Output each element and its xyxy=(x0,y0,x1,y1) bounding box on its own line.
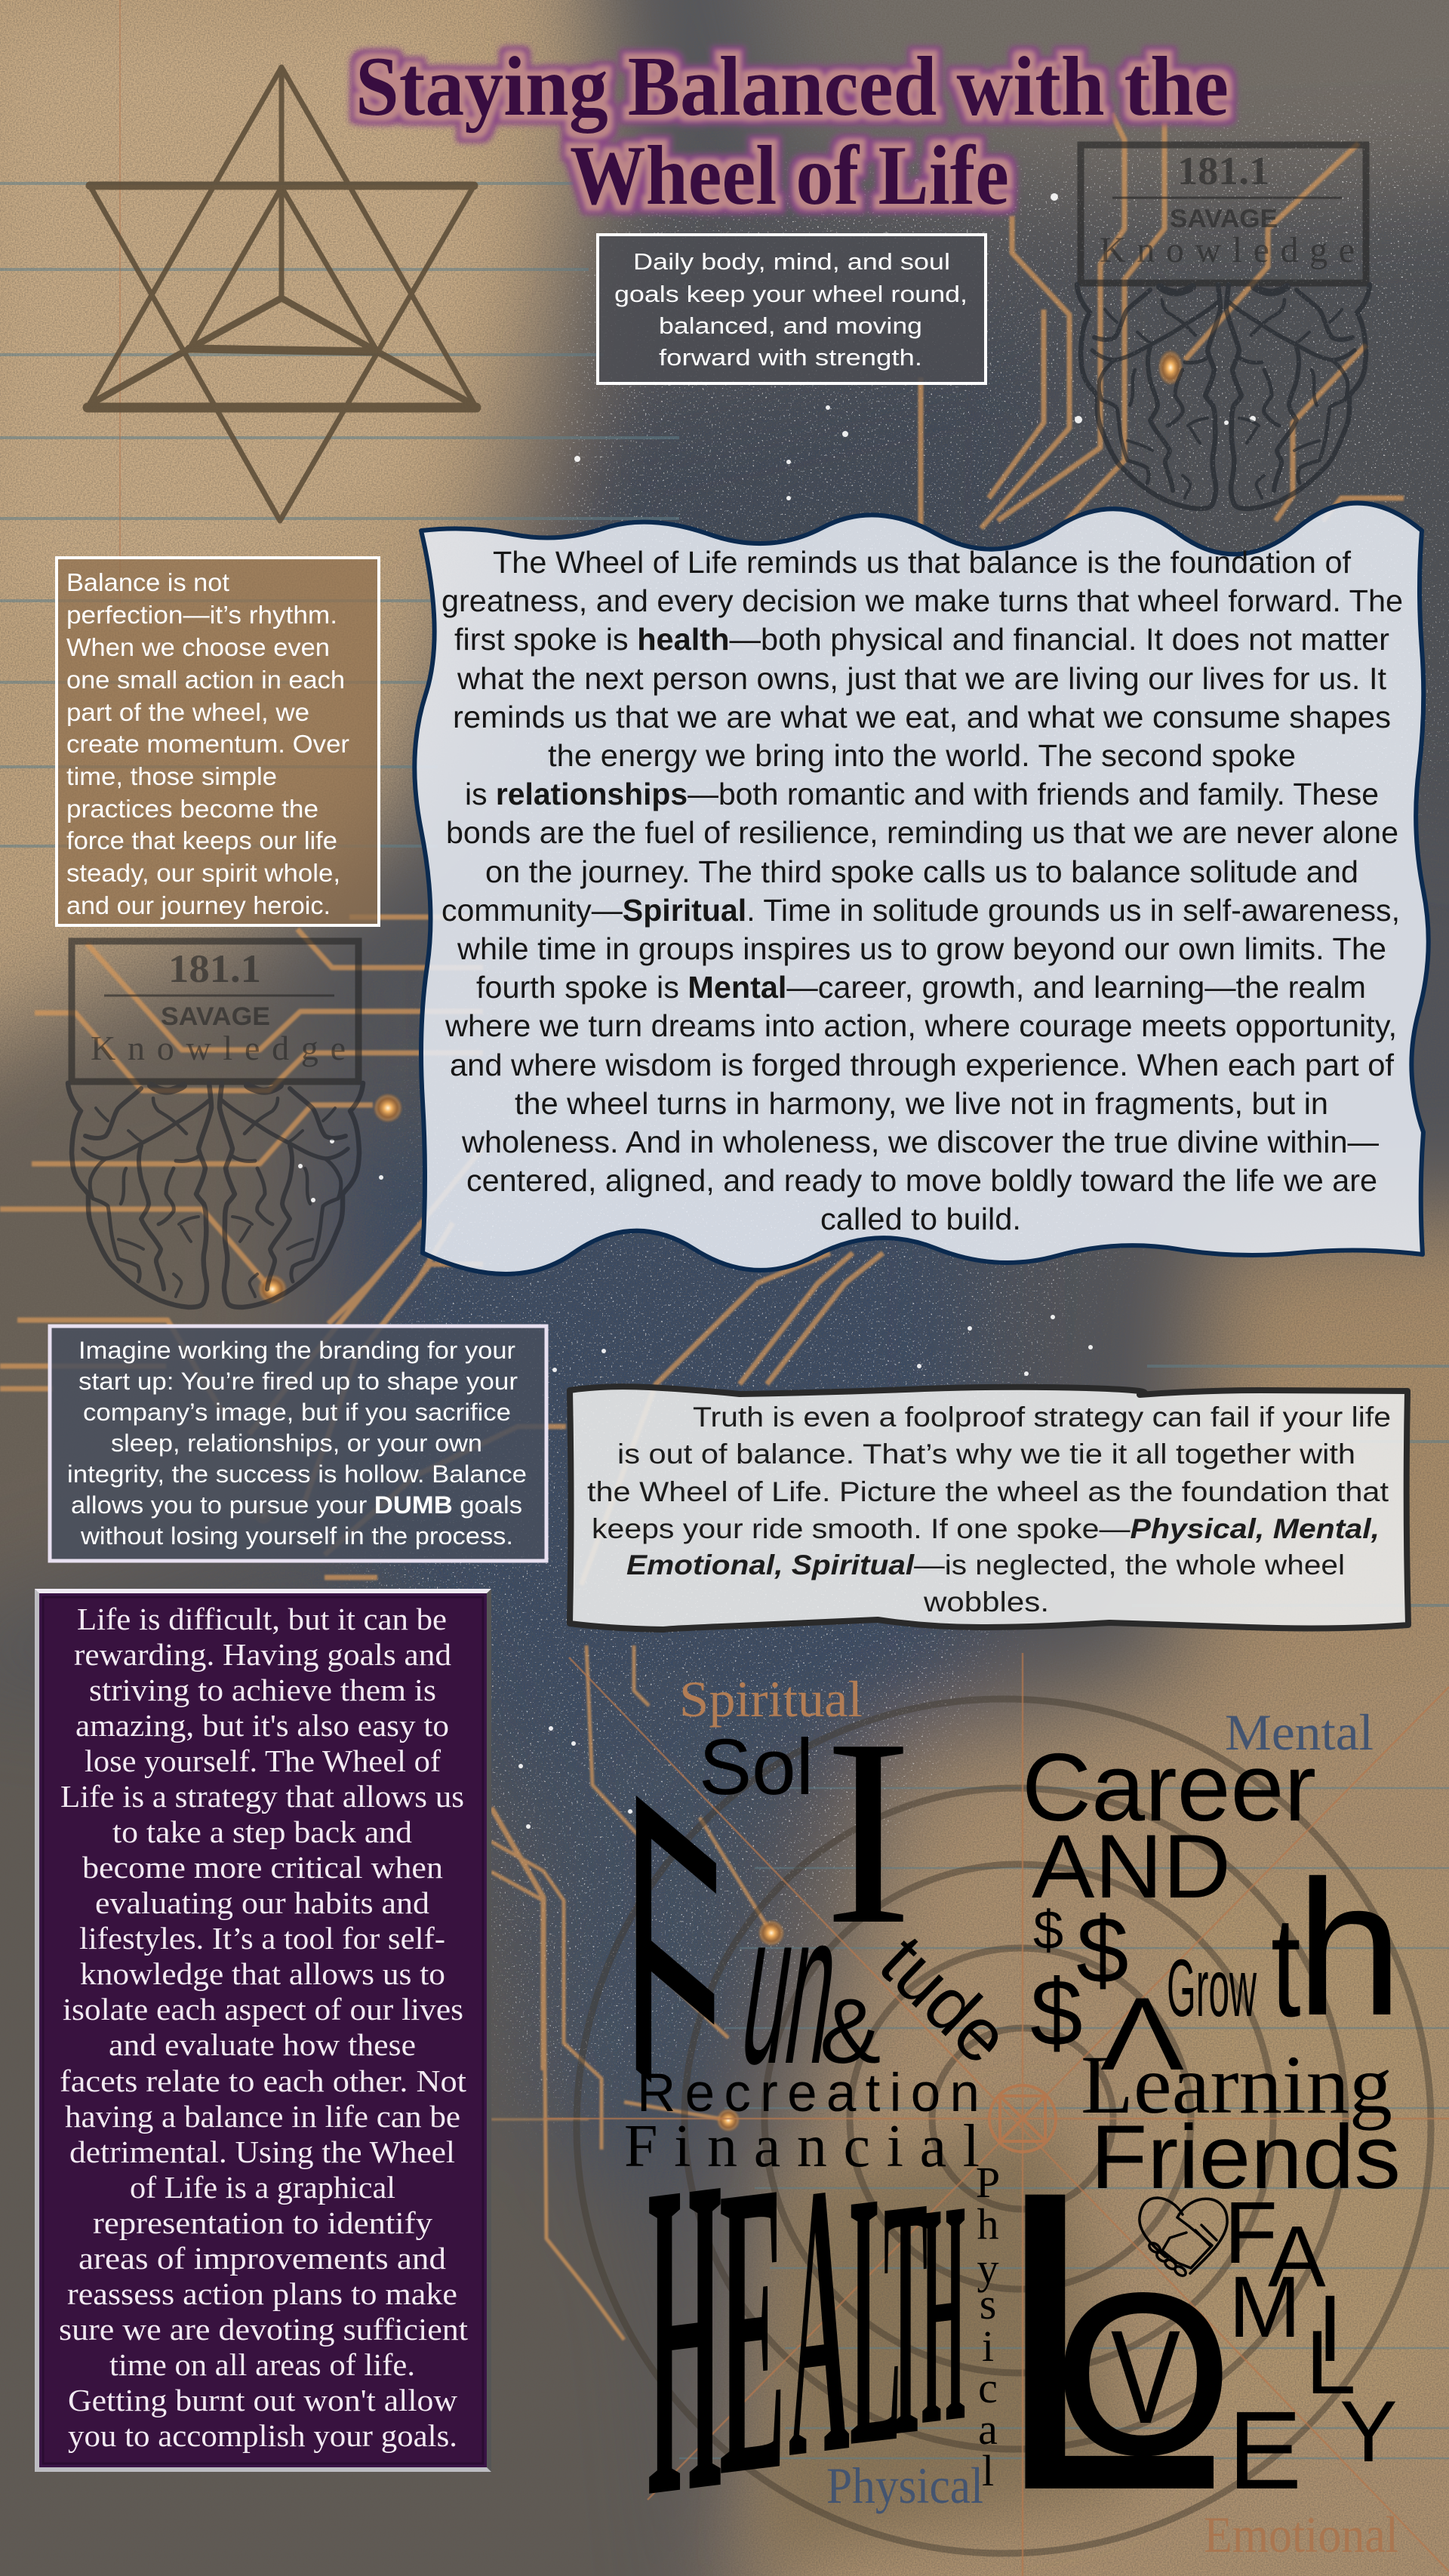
panel: truth wobble text xyxy=(570,1386,1408,1630)
panel: life is difficult: having a balance in life can be xyxy=(65,2099,460,2134)
logo: 181.1 Savage Knowledge (top right): SAVAGE xyxy=(1170,205,1278,233)
word art: mental quadrant: Grow xyxy=(1167,1942,1257,2033)
callout: balance is rhythm xyxy=(57,558,379,925)
panel: life is difficult: rewarding. Having goals and xyxy=(74,1637,451,1672)
callout: daily goals: balanced, and moving xyxy=(659,312,922,339)
panel: wheel of life main text: centered, aligned, and ready to move boldly toward the life we are xyxy=(466,1163,1377,1198)
panel: life is difficult: of Life is a graphical xyxy=(130,2170,395,2205)
icon: merkaba star xyxy=(88,67,476,521)
title: Wheel of Life xyxy=(570,129,1009,223)
callout: daily goals xyxy=(598,235,986,383)
callout: balance is rhythm: practices become the xyxy=(66,795,318,823)
word art: spiritual quadrant xyxy=(623,1684,1026,2227)
callout: balance is rhythm: create momentum. Over xyxy=(66,730,349,758)
callout: balance is rhythm: Balance is not xyxy=(66,568,229,596)
panel: wheel of life main text: on the journey. The third spoke calls us to balance solitude and xyxy=(485,854,1358,889)
word art: mental quadrant: Friends xyxy=(1091,2107,1401,2208)
panel: wheel of life main text: first spoke is health—both physical and financial. It does not matter xyxy=(454,622,1389,657)
panel: life is difficult: facets relate to each other. Not xyxy=(60,2064,467,2098)
word art: spiritual quadrant: tude xyxy=(864,1919,1026,2080)
panel: life is difficult: to take a step back and xyxy=(112,1814,412,1849)
title: Staying Balanced with the xyxy=(355,40,1229,134)
panel: truth wobble text: Truth is even a foolproof strategy can fail if your life xyxy=(693,1402,1391,1433)
callout: imagine branding: without losing yourself in the process. xyxy=(80,1522,513,1550)
word art: emotional quadrant: L xyxy=(990,2102,1228,2576)
panel: truth wobble text: is out of balance. That’s why we tie it all together with xyxy=(617,1439,1355,1470)
panel: life is difficult xyxy=(35,1589,491,2472)
chart: wheel of life rings xyxy=(543,1653,1449,2576)
word art: spiritual quadrant: Recreation xyxy=(637,2064,980,2123)
word art: spiritual quadrant: F xyxy=(623,1697,723,2227)
word art: spiritual quadrant: Financial xyxy=(624,2113,980,2180)
word art: spiritual quadrant: I xyxy=(824,1684,912,1980)
panel: truth wobble text: Emotional, Spiritual —is neglected, the whole wheel xyxy=(626,1550,1345,1580)
vertical word: Physical: Physical xyxy=(976,2158,1000,2495)
panel: wheel of life main text: fourth spoke is Mental—career, growth, and learning—the realm xyxy=(476,970,1366,1005)
panel: life is difficult: knowledge that allows us to xyxy=(80,1956,445,1991)
word art: mental quadrant: h xyxy=(1296,1841,1403,2056)
callout: balance is rhythm: one small action in each xyxy=(66,666,345,694)
panel: life is difficult: you to accomplish your goals. xyxy=(68,2418,457,2453)
word art: emotional quadrant: I xyxy=(1317,2276,1343,2381)
glowing nodes xyxy=(253,349,1183,2132)
callout: balance is rhythm: time, those simple xyxy=(66,762,277,790)
callout: balance is rhythm: When we choose even xyxy=(66,633,330,661)
panel: truth wobble text: keeps your ride smooth. If one spoke— Physical, Mental, xyxy=(592,1513,1380,1544)
word art: spiritual quadrant: & xyxy=(820,1980,881,2082)
icon: wheel hub xyxy=(989,2085,1056,2152)
word art: physical quadrant xyxy=(648,2080,965,2576)
callout: balance is rhythm: force that keeps our life xyxy=(66,826,337,854)
label: Emotional: Emotional xyxy=(1204,2506,1398,2563)
panel: wheel of life main text: the energy we bring into the world. The second spoke xyxy=(548,738,1296,773)
label: Spiritual: Spiritual xyxy=(679,1670,863,1728)
panel: life is difficult: reassess action plans to make xyxy=(67,2276,457,2311)
word art: physical quadrant: L xyxy=(850,2112,901,2523)
word art: mental quadrant: $ xyxy=(1076,1898,1129,2003)
panel: wheel of life main text: bonds are the fuel of resilience, reminding us that we are never alone xyxy=(446,815,1398,850)
panel: wheel of life main text: greatness, and every decision we make turns that wheel forward. The xyxy=(441,583,1403,618)
word art: emotional quadrant: M xyxy=(1229,2259,1301,2356)
callout: imagine branding: company’s image, but if you sacrifice xyxy=(83,1399,511,1426)
panel: truth wobble text: the Wheel of Life. Picture the wheel as the foundation that xyxy=(587,1476,1389,1507)
label: Mental: Mental xyxy=(1225,1703,1374,1761)
panel: life is difficult: striving to achieve them is xyxy=(89,1673,436,1707)
panel: life is difficult: and evaluate how these xyxy=(109,2027,416,2062)
logo: 181.1 Savage Knowledge (top right) xyxy=(1077,145,1370,509)
word art: mental quadrant: Career xyxy=(1022,1734,1316,1841)
word art: mental quadrant: AND xyxy=(1032,1816,1231,1917)
panel: wheel of life main text: wholeness. And in wholeness, we discover the true divine within— xyxy=(461,1125,1379,1159)
panel: wheel of life main text: while time in groups inspires us to grow beyond our own limits. The xyxy=(457,931,1386,966)
callout: daily goals: forward with strength. xyxy=(659,344,922,371)
word art: emotional quadrant xyxy=(990,2102,1398,2576)
panel: wheel of life main text: the wheel turns in harmony, we live not in fragments, but in xyxy=(515,1086,1328,1121)
panel: wheel of life main text: called to build. xyxy=(820,1202,1021,1236)
word art: physical quadrant: T xyxy=(884,2125,928,2510)
panel: life is difficult: amazing, but it's also easy to xyxy=(75,1708,449,1743)
callout: imagine branding xyxy=(50,1326,546,1561)
word art: emotional quadrant: F xyxy=(1224,2184,1278,2282)
callout: imagine branding: Imagine working the branding for your xyxy=(78,1337,515,1364)
word art: mental quadrant: Learning xyxy=(1081,2039,1392,2131)
word art: mental quadrant xyxy=(1022,1734,1403,2208)
word art: mental quadrant: Λ xyxy=(1100,1977,1184,2092)
logo: 181.1 Savage Knowledge (top right): Knowledge xyxy=(1100,230,1355,270)
word art: physical quadrant: H xyxy=(921,2133,965,2492)
panel: wheel of life main text: what the next person owns, just that we are living our lives for us. It xyxy=(457,661,1387,696)
logo: 181.1 Savage Knowledge (left): SAVAGE xyxy=(161,1002,270,1031)
icon: handshake heart xyxy=(1140,2198,1227,2278)
word art: mental quadrant: $ xyxy=(1030,1961,1083,2066)
word art: spiritual quadrant: un xyxy=(730,1867,852,2110)
callout: daily goals: goals keep your wheel round, xyxy=(614,281,968,307)
word art: emotional quadrant: A xyxy=(1268,2208,1326,2305)
panel: life is difficult: Getting burnt out won't allow xyxy=(68,2383,457,2418)
panel: life is difficult: isolate each aspect of our lives xyxy=(63,1992,463,2027)
panel: wheel of life main text: community—Spiritual. Time in solitude grounds us in self-awareness, xyxy=(441,893,1400,928)
logo: 181.1 Savage Knowledge (left): 181.1 xyxy=(168,947,261,991)
word art: emotional quadrant: E xyxy=(1228,2389,1302,2513)
word art: emotional quadrant: L xyxy=(1306,2312,1356,2413)
word art: physical quadrant: A xyxy=(789,2101,850,2541)
panel: life is difficult: detrimental. Using the Wheel xyxy=(69,2134,455,2169)
title xyxy=(355,40,1229,223)
logo: 181.1 Savage Knowledge (top right): 181.1 xyxy=(1177,149,1269,193)
callout: balance is rhythm: part of the wheel, we xyxy=(66,698,309,726)
panel: wheel of life main text: reminds us that we are what we eat, and what we consume shapes xyxy=(453,700,1391,734)
callout: imagine branding: sleep, relationships, or your own xyxy=(111,1430,482,1457)
callout: balance is rhythm: perfection—it’s rhythm. xyxy=(66,601,337,629)
word art: spiritual quadrant: Sol xyxy=(699,1723,814,1811)
panel: wheel of life main text: The Wheel of Life reminds us that balance is the foundation of xyxy=(493,545,1352,580)
label: Physical: Physical xyxy=(826,2457,983,2514)
callout: balance is rhythm: steady, our spirit whole, xyxy=(66,859,340,887)
panel: life is difficult: lifestyles. It’s a tool for self- xyxy=(79,1921,445,1956)
panel: life is difficult: evaluating our habits and xyxy=(95,1885,429,1920)
panel: wheel of life main text: is relationships—both romantic and with friends and family. These xyxy=(465,777,1379,811)
word art: emotional quadrant: V xyxy=(1111,2304,1180,2451)
panel: life is difficult: Life is difficult, but it can be xyxy=(77,1602,447,1636)
word art: physical quadrant: E xyxy=(719,2093,786,2565)
panel: life is difficult: areas of improvements and xyxy=(78,2241,446,2276)
word art: mental quadrant: t xyxy=(1271,1886,1301,2047)
logo: 181.1 Savage Knowledge (left) xyxy=(68,941,363,1307)
word art: mental quadrant: $ xyxy=(1033,1900,1063,1961)
panel: wheel of life main text: where we turn dreams into action, where courage meets opportunity, xyxy=(445,1008,1397,1043)
panel: truth wobble text: wobbles. xyxy=(923,1587,1049,1617)
callout: imagine branding: start up: You’re fired up to shape your xyxy=(78,1368,518,1395)
callout: imagine branding: integrity, the success is hollow. Balance xyxy=(67,1460,527,1488)
callout: daily goals: Daily body, mind, and soul xyxy=(633,248,950,275)
word art: emotional quadrant: Y xyxy=(1340,2384,1398,2480)
panel: life is difficult: sure we are devoting sufficient xyxy=(59,2312,469,2347)
panel: life is difficult: time on all areas of life. xyxy=(109,2347,415,2382)
panel: life is difficult: become more critical when xyxy=(82,1850,443,1885)
panel: life is difficult: Life is a strategy that allows us xyxy=(60,1779,464,1814)
panel: life is difficult: representation to identify xyxy=(93,2205,433,2240)
callout: balance is rhythm: and our journey heroic. xyxy=(66,891,331,919)
logo: 181.1 Savage Knowledge (left): Knowledge xyxy=(91,1029,346,1067)
panel: wheel of life main text xyxy=(414,503,1429,1274)
panel: wheel of life main text: and where wisdom is forged through experience. When each part of xyxy=(450,1048,1395,1082)
word art: emotional quadrant: O xyxy=(1055,2247,1231,2501)
callout: imagine branding: allows you to pursue your DUMB goals xyxy=(71,1491,522,1519)
panel: life is difficult: lose yourself. The Wheel of xyxy=(85,1743,441,1778)
